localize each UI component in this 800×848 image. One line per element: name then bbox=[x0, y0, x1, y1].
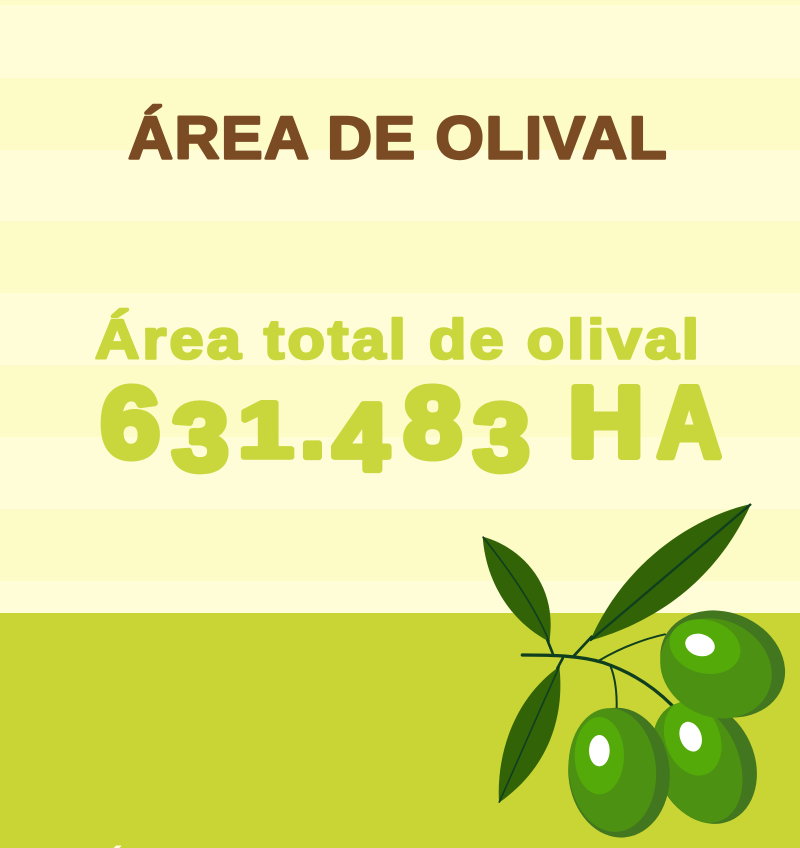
leaf: upper right bbox=[590, 504, 751, 641]
stems bbox=[522, 634, 672, 709]
big number: 631.483 HA: 3 bbox=[172, 384, 229, 490]
icon: olive branch bbox=[483, 504, 800, 842]
big number: 631.483 HA: A bbox=[657, 367, 721, 479]
leaf: upper left bbox=[483, 537, 551, 642]
big number: 631.483 HA bbox=[100, 366, 721, 490]
big number: 631.483 HA: 3 bbox=[473, 384, 530, 490]
big number: 631.483 HA: 4 bbox=[333, 384, 389, 490]
olive: upper right bbox=[644, 592, 800, 736]
panel: green lower band bbox=[0, 613, 800, 848]
title: ÁREA DE OLIVAL bbox=[128, 105, 667, 171]
leaf: lower left bbox=[499, 667, 560, 803]
big number: 631.483 HA: 6 bbox=[100, 366, 160, 478]
big number: 631.483 HA: H bbox=[568, 366, 644, 478]
subtitle: total area: Área total de olival bbox=[95, 308, 699, 371]
olive: bottom left bbox=[563, 703, 675, 842]
big number: 631.483 HA: 8 bbox=[404, 366, 462, 478]
big number: 631.483 HA: 1 bbox=[238, 386, 294, 475]
big number: 631.483 HA: . bbox=[300, 377, 325, 477]
olive: lower right bbox=[634, 685, 776, 841]
